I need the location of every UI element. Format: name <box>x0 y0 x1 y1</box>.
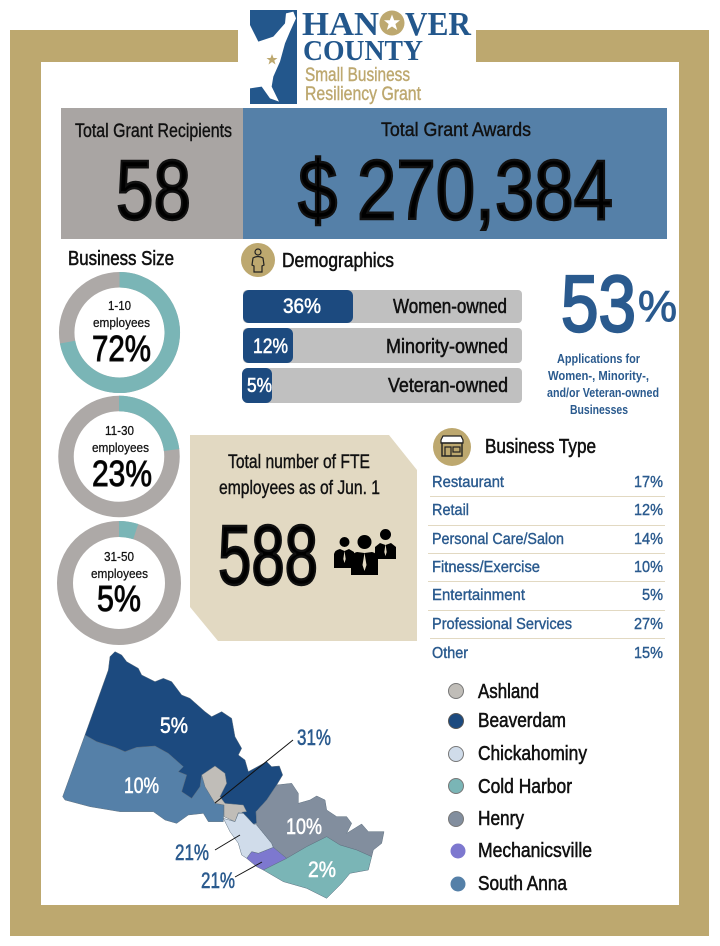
donut chart: 31-50 employees: employees <box>91 566 148 581</box>
map: county districts <box>63 652 384 898</box>
map legend: Beaverdam <box>478 710 566 732</box>
map legend: Cold Harbor <box>478 776 572 798</box>
donut chart: 1-10 employees <box>67 280 172 385</box>
icon: person <box>241 243 275 277</box>
logo subtitle: Resiliency Grant <box>305 84 422 105</box>
donut chart: 11-30 employees: 23% <box>92 453 152 494</box>
map legend: Ashland <box>478 681 539 703</box>
panel: total grant awards <box>243 108 667 239</box>
table: business type: Personal Care/Salon <box>432 531 564 548</box>
donut chart: 1-10 employees: 72% <box>92 328 151 369</box>
panel: total grant recipients: 58 <box>116 143 191 237</box>
table: business type: Fitness/Exercise <box>432 559 540 576</box>
bar: women-owned <box>243 290 522 323</box>
panel: total grant awards: Total Grant Awards <box>381 120 531 141</box>
table: business type: 27% <box>634 616 663 633</box>
map percent labels: 10% <box>286 814 322 839</box>
bar: minority-owned: Minority-owned <box>386 336 508 358</box>
logo subtitle <box>305 65 422 105</box>
donut chart: 11-30 employees: 11-30 <box>105 423 134 438</box>
callout caption: Applications for <box>557 352 640 366</box>
panel: FTE employees: 588 <box>218 508 318 602</box>
donut chart: 31-50 employees <box>65 529 173 637</box>
logo name: VER <box>405 6 471 43</box>
district: Ashland <box>202 766 247 822</box>
table: business type: 5% <box>642 587 663 604</box>
logo name: COUNTY <box>303 35 423 67</box>
table: business type: Professional Services <box>432 616 572 633</box>
table: business type: 15% <box>634 645 663 662</box>
donut chart: 1-10 employees: 1-10 <box>108 298 131 313</box>
map percent labels: 21% <box>175 840 209 865</box>
map percent labels: 10% <box>124 773 159 798</box>
map legend: Henry <box>478 808 524 830</box>
donut chart: 11-30 employees: employees <box>92 440 149 455</box>
map percent labels: 31% <box>297 725 331 750</box>
bar: minority-owned <box>243 328 522 363</box>
heading: demographics: Demographics <box>282 250 394 272</box>
icon: business people <box>334 529 396 575</box>
panel: total grant awards: $ 270,384 <box>298 143 613 237</box>
table: business type: 10% <box>634 559 663 576</box>
panel: total grant recipients: Total Grant Recipients <box>75 121 232 142</box>
table: business type: Retail <box>432 502 469 519</box>
map legend: Mechanicsville <box>478 840 592 862</box>
bar: veteran-owned <box>242 368 522 403</box>
table: business type: 14% <box>634 531 663 548</box>
map leader lines <box>215 740 293 877</box>
map percent labels <box>124 713 336 893</box>
callout: 53 percent: 53 <box>561 259 636 348</box>
map legend: South Anna <box>478 873 568 895</box>
bar: women-owned: 36% <box>283 295 321 318</box>
map percent labels: 21% <box>201 868 235 893</box>
district: Cold Harbor <box>263 837 372 898</box>
bar: veteran-owned: 5% <box>247 375 272 397</box>
donut chart: 31-50 employees: 31-50 <box>104 549 134 564</box>
heading: business type: Business Type <box>485 436 596 458</box>
callout: 53 percent: % <box>638 282 677 331</box>
table: business type: Entertainment <box>432 587 526 604</box>
table: business type <box>428 474 665 662</box>
logo map mark <box>250 10 297 104</box>
donut chart: 11-30 employees <box>66 404 172 510</box>
map percent labels: 5% <box>160 713 188 738</box>
icon: storefront <box>433 428 471 466</box>
bar: minority-owned: 12% <box>253 335 288 358</box>
heading: business size: Business Size <box>68 248 174 270</box>
panel: FTE employees: Total number of FTE <box>228 452 370 473</box>
district: South Anna <box>63 735 224 823</box>
table: business type: 12% <box>634 502 663 519</box>
panel: FTE employees: employees as of Jun. 1 <box>219 478 380 499</box>
logo name: HAN <box>302 6 379 43</box>
district: Chickahominy <box>223 813 273 858</box>
callout caption: Businesses <box>570 403 628 417</box>
callout caption: and/or Veteran-owned <box>547 386 659 400</box>
district: Mechanicsville <box>247 847 287 870</box>
table: business type: Other <box>432 645 469 662</box>
bar: women-owned: Women-owned <box>393 296 507 318</box>
table: business type: Restaurant <box>432 474 505 491</box>
panel: total grant recipients <box>61 108 243 239</box>
map percent labels: 2% <box>308 857 336 882</box>
logo subtitle: Small Business <box>305 65 410 86</box>
panel: FTE employees <box>190 435 417 641</box>
bar: veteran-owned: Veteran-owned <box>388 375 508 397</box>
logo name <box>302 6 471 67</box>
callout: 53 percent <box>547 259 677 417</box>
logo <box>250 6 471 105</box>
district: Beaverdam <box>85 652 283 824</box>
donut chart: 1-10 employees: employees <box>93 315 150 330</box>
callout caption <box>547 352 659 417</box>
table: business type: 17% <box>634 474 663 491</box>
map legend: Chickahominy <box>478 743 587 765</box>
donut chart: 31-50 employees: 5% <box>97 578 141 619</box>
district: Henry <box>256 783 384 858</box>
callout caption: Women-, Minority-, <box>548 369 649 383</box>
map legend <box>448 681 592 895</box>
